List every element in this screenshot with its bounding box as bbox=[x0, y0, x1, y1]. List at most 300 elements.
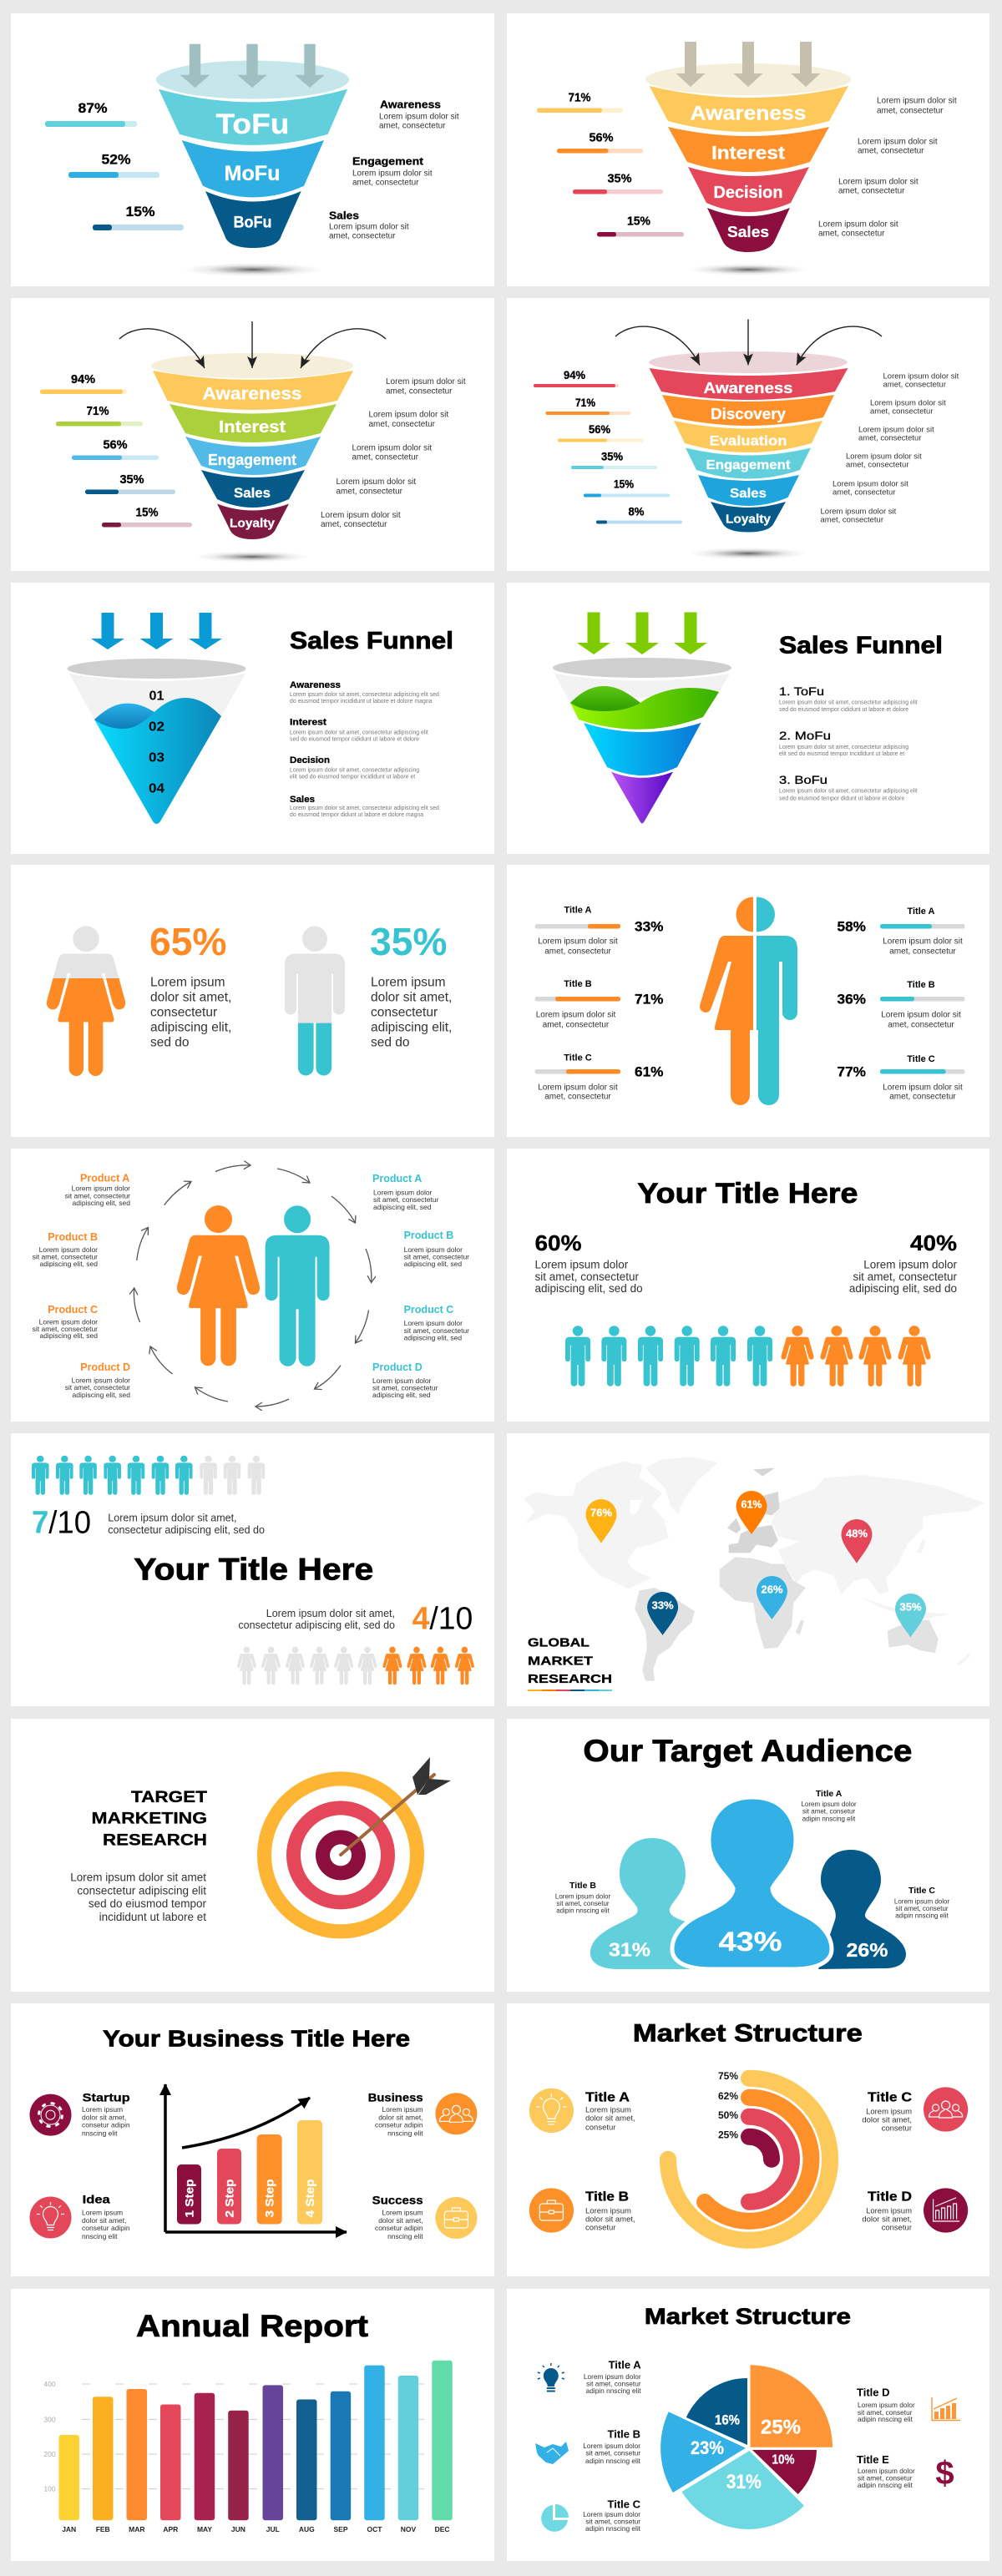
heading: MARKETING bbox=[92, 1810, 207, 1828]
panel: blue sales funnel bbox=[11, 583, 494, 854]
stat 15% bbox=[597, 214, 684, 237]
description 2 bbox=[369, 411, 448, 429]
label Title B: Lorem ipsum dolor bbox=[555, 1893, 610, 1900]
stat 60%: adipiscing elit, sed do bbox=[534, 1282, 643, 1295]
item MoFu: 2. MoFu bbox=[779, 729, 831, 742]
item Awareness bbox=[290, 680, 439, 705]
colour rule bbox=[528, 1690, 612, 1691]
panel: six step funnel bbox=[507, 298, 989, 571]
right stat B: Lorem ipsum dolor sit bbox=[881, 1010, 961, 1020]
label Title B: adipin nnscing elit bbox=[585, 2457, 641, 2465]
funnel segment ToFu: ToFu bbox=[215, 109, 289, 140]
label Title B bbox=[555, 1881, 610, 1915]
description 4: amet, consectetur bbox=[818, 229, 885, 239]
label Idea: nnscing elit bbox=[82, 2232, 118, 2240]
segment Interest: Interest bbox=[219, 418, 286, 437]
stat 15%: 15% bbox=[125, 204, 155, 220]
step bar 2 bbox=[217, 2149, 241, 2224]
item Awareness: do eiusmod tempor incididunt ut labore et dolore magna bbox=[290, 699, 433, 705]
segment Awareness: Awareness bbox=[703, 380, 793, 397]
stat 35% bbox=[573, 172, 663, 194]
description right: adipiscing elit, bbox=[371, 1020, 452, 1035]
label Startup: dolor sit amet, bbox=[82, 2113, 126, 2121]
stat 65%: 65% bbox=[149, 920, 227, 963]
funnel graphic bbox=[553, 658, 731, 823]
pie chart: 31% bbox=[726, 2471, 762, 2493]
bar chart: APR bbox=[163, 2525, 178, 2533]
stat 52%: 52% bbox=[102, 152, 130, 167]
description 1: Lorem ipsum dolor sit bbox=[386, 377, 466, 386]
woman figure bbox=[177, 1205, 260, 1366]
stat 71%: 71% bbox=[575, 396, 595, 409]
pin 61% bbox=[736, 1491, 767, 1534]
stat 60%: Lorem ipsum dolor bbox=[534, 1259, 629, 1270]
split figure bbox=[700, 897, 797, 1105]
panel: our target audience bbox=[507, 1719, 989, 1992]
target rings bbox=[257, 1771, 424, 1938]
description left: consectetur bbox=[150, 1005, 217, 1020]
label Title D: adipin nnscing elit bbox=[858, 2415, 913, 2423]
heading: Market Structure bbox=[633, 2020, 863, 2047]
description right: sed do bbox=[371, 1035, 410, 1050]
right Product C: Product C bbox=[404, 1304, 453, 1316]
stat 60%: 60% bbox=[534, 1230, 581, 1255]
segment Sales bbox=[698, 475, 799, 506]
left Product B: Lorem ipsum dolor bbox=[39, 1245, 98, 1254]
funnel segment MoFu bbox=[182, 140, 324, 197]
label Title D bbox=[862, 2190, 912, 2232]
description bbox=[108, 1513, 265, 1536]
description bbox=[70, 1871, 207, 1923]
description 1: Lorem ipsum dolor sit bbox=[877, 97, 957, 105]
entry arrows bbox=[180, 44, 325, 88]
label Title B: adipin nnscing elit bbox=[556, 1907, 610, 1915]
item ToFu: 1. ToFu bbox=[779, 684, 824, 698]
curved entry arrows bbox=[615, 319, 882, 366]
bar chart: MAR bbox=[129, 2525, 144, 2533]
label Title E: Lorem ipsum dolor bbox=[858, 2467, 915, 2475]
right Product A bbox=[372, 1173, 439, 1211]
icon: people bbox=[924, 2087, 968, 2132]
heading bbox=[92, 1789, 207, 1850]
icon: dollar: $ bbox=[935, 2455, 954, 2492]
panel: couple with product cycle bbox=[11, 1149, 494, 1422]
description: Lorem ipsum dolor sit amet, bbox=[266, 1608, 395, 1619]
left Product D: adipiscing elit, sed bbox=[73, 1391, 130, 1399]
pictogram row bbox=[565, 1326, 931, 1386]
item Decision bbox=[290, 755, 419, 780]
left stat A: Title A bbox=[564, 905, 592, 915]
label Engagement: amet, consectetur bbox=[352, 179, 419, 187]
right stat B: amet, consectetur bbox=[888, 1020, 954, 1030]
pin 61%: 61% bbox=[741, 1498, 762, 1511]
left Product A bbox=[65, 1172, 130, 1207]
stat 8% bbox=[596, 504, 682, 524]
label Success bbox=[372, 2193, 423, 2240]
panel: global market research map bbox=[507, 1433, 989, 1706]
step bar 1: 1 Step bbox=[182, 2179, 195, 2217]
stat 71% bbox=[546, 396, 630, 415]
right stat C: amet, consectetur bbox=[889, 1092, 956, 1102]
label Success: consetur adipin bbox=[375, 2224, 423, 2232]
description 2 bbox=[858, 137, 938, 155]
left Product B: sit amet, consectetur bbox=[33, 1253, 98, 1261]
description 6: Lorem ipsum dolor sit bbox=[820, 508, 897, 516]
funnel rim bbox=[156, 60, 349, 98]
description 2 bbox=[870, 399, 946, 416]
funnel shadow bbox=[688, 264, 808, 275]
panel: 7 of 10 and 4 of 10 bbox=[11, 1433, 494, 1706]
label Success: dolor sit amet, bbox=[378, 2216, 423, 2225]
label Startup: Startup bbox=[83, 2090, 130, 2104]
stat 52% bbox=[68, 152, 159, 178]
step numbers: 03 bbox=[149, 751, 164, 765]
description 5: Lorem ipsum dolor sit bbox=[321, 511, 401, 520]
left Product B bbox=[33, 1231, 98, 1268]
description 2: amet, consectetur bbox=[858, 147, 924, 155]
stat 56%: 56% bbox=[589, 422, 611, 436]
panel: five step funnel bbox=[11, 298, 494, 571]
segment Awareness bbox=[650, 368, 848, 400]
description bbox=[238, 1608, 395, 1631]
description left: sed do bbox=[150, 1035, 190, 1050]
label Title B bbox=[583, 2427, 641, 2465]
left Product A: Lorem ipsum dolor bbox=[72, 1184, 130, 1193]
step numbers: 01 bbox=[149, 689, 164, 703]
woman figure 65% bbox=[47, 926, 125, 1076]
item Interest: sed do eiusmod tempor cididunt ut labore et dolore bbox=[290, 736, 419, 743]
left Product D bbox=[65, 1361, 130, 1399]
right stat C: 77% bbox=[837, 1063, 866, 1080]
stat 60% bbox=[534, 1230, 643, 1295]
stat 35% bbox=[85, 472, 175, 494]
description left: Lorem ipsum bbox=[150, 975, 225, 990]
label Title A: Title A bbox=[609, 2359, 641, 2371]
stat 15%: 15% bbox=[614, 477, 634, 491]
icon: chart bbox=[924, 2188, 968, 2233]
left stat C: Title C bbox=[564, 1053, 592, 1063]
stat 15% bbox=[584, 477, 670, 498]
left stat C: 61% bbox=[635, 1063, 663, 1080]
item BoFu: sed do eiusmod tempor didunt ut labore et dolore bbox=[779, 796, 904, 801]
left stat A bbox=[534, 905, 663, 957]
description 3 bbox=[352, 444, 432, 462]
icon: briefcase bbox=[435, 2197, 477, 2239]
left stat B: 71% bbox=[635, 992, 663, 1007]
item Sales: do eiusmod tempor didunt ut labore et dolore magna bbox=[290, 812, 423, 818]
right stat A bbox=[837, 907, 965, 957]
pin 26%: 26% bbox=[762, 1583, 783, 1596]
left Product C: adipiscing elit, sed bbox=[40, 1331, 98, 1340]
stat 56% bbox=[557, 130, 643, 154]
right Product B bbox=[404, 1230, 469, 1268]
heading: Your Title Here bbox=[637, 1178, 858, 1210]
label Engagement bbox=[352, 155, 433, 187]
label Title E: sit amet, consetur bbox=[858, 2473, 913, 2482]
segment Sales bbox=[201, 470, 305, 508]
label Business: Lorem ipsum bbox=[382, 2105, 423, 2114]
segment Decision bbox=[688, 167, 809, 212]
right Product C: adipiscing elit, sed bbox=[404, 1334, 462, 1342]
world map bbox=[524, 1457, 984, 1681]
label Title A: Title A bbox=[585, 2090, 630, 2105]
panel: ToFu MoFu BoFu funnel bbox=[11, 13, 494, 286]
segment Engagement: Engagement bbox=[706, 458, 791, 472]
right Product A: Product A bbox=[372, 1173, 422, 1184]
panel: target marketing research bbox=[11, 1719, 494, 1992]
description 3: Lorem ipsum dolor sit bbox=[352, 444, 432, 452]
label Title B: Title B bbox=[608, 2427, 640, 2441]
bar chart: SEP bbox=[333, 2525, 348, 2533]
entry arrows bbox=[577, 613, 707, 654]
item Sales bbox=[290, 795, 439, 818]
pin 76% bbox=[586, 1499, 616, 1543]
left Product B: Product B bbox=[48, 1231, 98, 1243]
right stat A: amet, consectetur bbox=[889, 947, 956, 957]
step numbers: 02 bbox=[149, 720, 164, 735]
left stat B: Lorem ipsum dolor sit bbox=[536, 1010, 616, 1020]
funnel segment BoFu bbox=[205, 191, 301, 248]
description right: Lorem ipsum bbox=[371, 975, 446, 990]
label Title C: Title C bbox=[868, 2090, 912, 2105]
silhouette 43% bbox=[672, 1797, 832, 1969]
heading: Your Business Title Here bbox=[103, 2025, 410, 2052]
description 4: Lorem ipsum dolor sit bbox=[336, 477, 416, 487]
segment Awareness bbox=[153, 371, 353, 410]
bar chart: MAY bbox=[197, 2525, 212, 2533]
label Title B: sit amet, consetur bbox=[586, 2449, 640, 2457]
step bar 2: 2 Step bbox=[222, 2179, 235, 2217]
heading: GLOBAL bbox=[528, 1636, 590, 1649]
right stat C: Lorem ipsum dolor sit bbox=[883, 1083, 963, 1092]
label Title B: dolor sit amet, bbox=[585, 2215, 635, 2224]
description 4: Lorem ipsum dolor sit bbox=[818, 220, 898, 229]
step bar 3: 3 Step bbox=[262, 2179, 276, 2217]
pin 48% bbox=[842, 1519, 872, 1563]
funnel segment ToFu bbox=[159, 89, 347, 145]
label Title C: adipin nnscing elit bbox=[895, 1912, 949, 1920]
bar chart: JUL bbox=[266, 2525, 280, 2533]
step bar 4: 4 Step bbox=[303, 2179, 316, 2217]
label Startup bbox=[82, 2090, 130, 2137]
description 3: amet, consectetur bbox=[838, 187, 905, 195]
label Title D: Title D bbox=[868, 2190, 912, 2204]
stat 15%: 15% bbox=[627, 214, 650, 229]
funnel rim bbox=[645, 63, 851, 95]
ring values bbox=[718, 2070, 738, 2140]
step bar 1 bbox=[177, 2164, 201, 2224]
pin 48%: 48% bbox=[846, 1528, 868, 1539]
segment Engagement bbox=[686, 447, 811, 479]
description: Lorem ipsum dolor sit amet, bbox=[108, 1513, 237, 1524]
segment Loyalty bbox=[217, 504, 289, 539]
label Title A: Lorem ipsum dolor bbox=[584, 2372, 641, 2381]
label Success: nnscing elit bbox=[387, 2232, 423, 2240]
funnel shadow bbox=[690, 548, 807, 559]
stat 4 of 10: 4/10 bbox=[412, 1602, 473, 1637]
heading: Your Title Here bbox=[134, 1553, 373, 1586]
pin 76%: 76% bbox=[590, 1506, 612, 1519]
item BoFu: Lorem ipsum dolor sit amet, consectetur adipiscing elit bbox=[779, 788, 918, 795]
stat 56% bbox=[558, 422, 643, 442]
silhouette 31% bbox=[590, 1838, 693, 1969]
stat 56% bbox=[72, 437, 159, 460]
funnel shadow bbox=[195, 551, 309, 563]
label Business: dolor sit amet, bbox=[378, 2113, 423, 2121]
entry arrows bbox=[91, 613, 222, 649]
ring values: 25% bbox=[718, 2129, 738, 2140]
right Product B: Lorem ipsum dolor bbox=[404, 1245, 463, 1254]
label Title D: Lorem ipsum dolor bbox=[858, 2401, 915, 2409]
item Decision: Decision bbox=[290, 755, 330, 765]
label Title D: consetur bbox=[882, 2224, 912, 2232]
label Title A: sit amet, consetur bbox=[802, 1808, 856, 1815]
segment Sales: Sales bbox=[234, 485, 271, 501]
silhouette 31%: 31% bbox=[609, 1938, 650, 1960]
label Title C: sit amet, consetur bbox=[895, 1905, 949, 1912]
description 2: amet, consectetur bbox=[369, 420, 436, 429]
bar chart: 300 bbox=[43, 2415, 56, 2423]
curved entry arrows bbox=[119, 321, 386, 368]
description: sed do eiusmod tempor bbox=[89, 1897, 207, 1910]
stat 40%: adipiscing elit, sed do bbox=[849, 1282, 957, 1295]
silhouette 26% bbox=[818, 1850, 906, 1969]
label Title C: dolor sit amet, bbox=[862, 2115, 912, 2125]
label Idea bbox=[82, 2193, 130, 2240]
description: consectetur adipiscing elit, sed do bbox=[108, 1524, 265, 1536]
right Product D: Lorem ipsum dolor bbox=[372, 1376, 432, 1385]
icon: orange chart bbox=[932, 2397, 960, 2421]
ring values: 62% bbox=[718, 2090, 738, 2102]
label Sales: Lorem ipsum dolor sit bbox=[329, 222, 409, 232]
panel: annual report bbox=[11, 2289, 494, 2561]
step numbers bbox=[149, 689, 164, 796]
axes bbox=[165, 2084, 347, 2232]
stat 15% bbox=[93, 204, 184, 230]
stat 40%: sit amet, consectetur bbox=[853, 1270, 957, 1283]
label Business: nnscing elit bbox=[387, 2129, 423, 2137]
stat 71% bbox=[537, 90, 623, 113]
segment Discovery bbox=[662, 395, 834, 426]
label Title C bbox=[894, 1886, 949, 1920]
description 4: amet, consectetur bbox=[336, 487, 403, 496]
description 3 bbox=[858, 426, 934, 442]
segment Decision: Decision bbox=[713, 184, 783, 202]
label Title C: adipin nnscing elit bbox=[585, 2524, 641, 2533]
segment Sales: Sales bbox=[730, 487, 767, 501]
label Title B: Lorem ipsum dolor bbox=[583, 2442, 640, 2450]
description: consectetur adipiscing elit, sed do bbox=[238, 1619, 395, 1631]
stat 35%: 35% bbox=[601, 449, 624, 462]
bar chart: DEC bbox=[435, 2525, 450, 2533]
segment Discovery: Discovery bbox=[711, 406, 786, 422]
bar chart: JUN bbox=[231, 2525, 245, 2533]
segment Engagement bbox=[185, 437, 321, 475]
stat 35%: 35% bbox=[370, 920, 448, 963]
pin 35%: 35% bbox=[900, 1601, 922, 1613]
label Business: consetur adipin bbox=[375, 2121, 423, 2129]
item BoFu: 3. BoFu bbox=[779, 773, 827, 786]
label Awareness bbox=[379, 98, 459, 130]
label Idea: consetur adipin bbox=[82, 2224, 130, 2232]
description 5: amet, consectetur bbox=[321, 520, 387, 529]
item ToFu bbox=[779, 684, 918, 713]
item MoFu: Lorem ipsum dolor sit amet, consectetur adipiscing bbox=[779, 745, 908, 750]
item Sales: Sales bbox=[290, 795, 315, 805]
label Idea: Idea bbox=[83, 2193, 110, 2206]
item MoFu: elit sed do eiusmod tempor incididunt ut labore et bbox=[779, 751, 904, 757]
stat 87%: 87% bbox=[78, 100, 107, 116]
label Awareness: amet, consectetur bbox=[379, 122, 446, 130]
stat 15% bbox=[102, 506, 192, 528]
panel: 60 40 people bbox=[507, 1149, 989, 1422]
growth arrow bbox=[182, 2098, 310, 2148]
left Product D: Lorem ipsum dolor bbox=[72, 1376, 130, 1384]
label Title A: adipin nnscing elit bbox=[586, 2387, 641, 2395]
item MoFu bbox=[779, 729, 908, 757]
label Startup: Lorem ipsum bbox=[82, 2105, 123, 2114]
label Title B bbox=[585, 2190, 635, 2232]
silhouette 43%: 43% bbox=[718, 1927, 782, 1957]
description 2: amet, consectetur bbox=[870, 407, 934, 416]
label Title B: Title B bbox=[585, 2190, 629, 2204]
left Product C: sit amet, consectetur bbox=[33, 1325, 98, 1333]
label Title B: Title B bbox=[569, 1881, 596, 1891]
icon: light bulb bbox=[529, 2089, 574, 2133]
stat 87% bbox=[45, 100, 137, 127]
description 5 bbox=[832, 479, 908, 498]
left Product A: Product A bbox=[80, 1172, 129, 1184]
right Product C: sit amet, consectetur bbox=[404, 1326, 469, 1335]
label Title B: consetur bbox=[585, 2224, 615, 2232]
label Title B: sit amet, consetur bbox=[556, 1900, 610, 1907]
right stat A: Title A bbox=[907, 907, 935, 917]
segment Awareness bbox=[650, 86, 848, 132]
label Title D: Title D bbox=[857, 2386, 890, 2399]
description 5: Lorem ipsum dolor sit bbox=[832, 479, 908, 489]
label Title A: sit amet, consetur bbox=[586, 2379, 641, 2387]
heading: Annual Report bbox=[136, 2309, 368, 2343]
stat 35% bbox=[571, 449, 657, 469]
description 4 bbox=[846, 452, 922, 469]
right Product A: adipiscing elit, sed bbox=[373, 1203, 432, 1211]
label Title D: sit amet, consetur bbox=[858, 2408, 913, 2417]
label Sales bbox=[329, 209, 409, 240]
ring values: 75% bbox=[718, 2070, 738, 2082]
label Title C: Lorem ipsum dolor bbox=[583, 2510, 640, 2518]
description left: adipiscing elit, bbox=[150, 1020, 231, 1035]
radial chart bbox=[668, 2078, 830, 2240]
right stat A: 58% bbox=[837, 918, 866, 935]
man figure 35% bbox=[285, 926, 345, 1075]
label Title D: dolor sit amet, bbox=[862, 2215, 912, 2224]
item Sales: Lorem ipsum dolor sit amet, consectetur adipiscing elit sed bbox=[290, 806, 439, 811]
stat 60%: sit amet, consectetur bbox=[534, 1270, 640, 1283]
right Product D: sit amet, consectetur bbox=[372, 1383, 438, 1392]
item Awareness: Lorem ipsum dolor sit amet, consectetur adipiscing elit sed bbox=[290, 692, 439, 698]
segment Evaluation bbox=[674, 421, 822, 452]
segment Awareness: Awareness bbox=[202, 384, 302, 404]
description 2: Lorem ipsum dolor sit bbox=[870, 399, 946, 407]
man figure bbox=[266, 1205, 330, 1366]
icon: gear bbox=[30, 2094, 72, 2136]
description 4: amet, consectetur bbox=[846, 461, 909, 469]
description right: consectetur bbox=[371, 1005, 438, 1020]
label Engagement: Lorem ipsum dolor sit bbox=[352, 169, 433, 179]
pin 35% bbox=[895, 1594, 926, 1638]
label Startup: consetur adipin bbox=[82, 2121, 130, 2129]
step bar 4 bbox=[297, 2120, 322, 2224]
